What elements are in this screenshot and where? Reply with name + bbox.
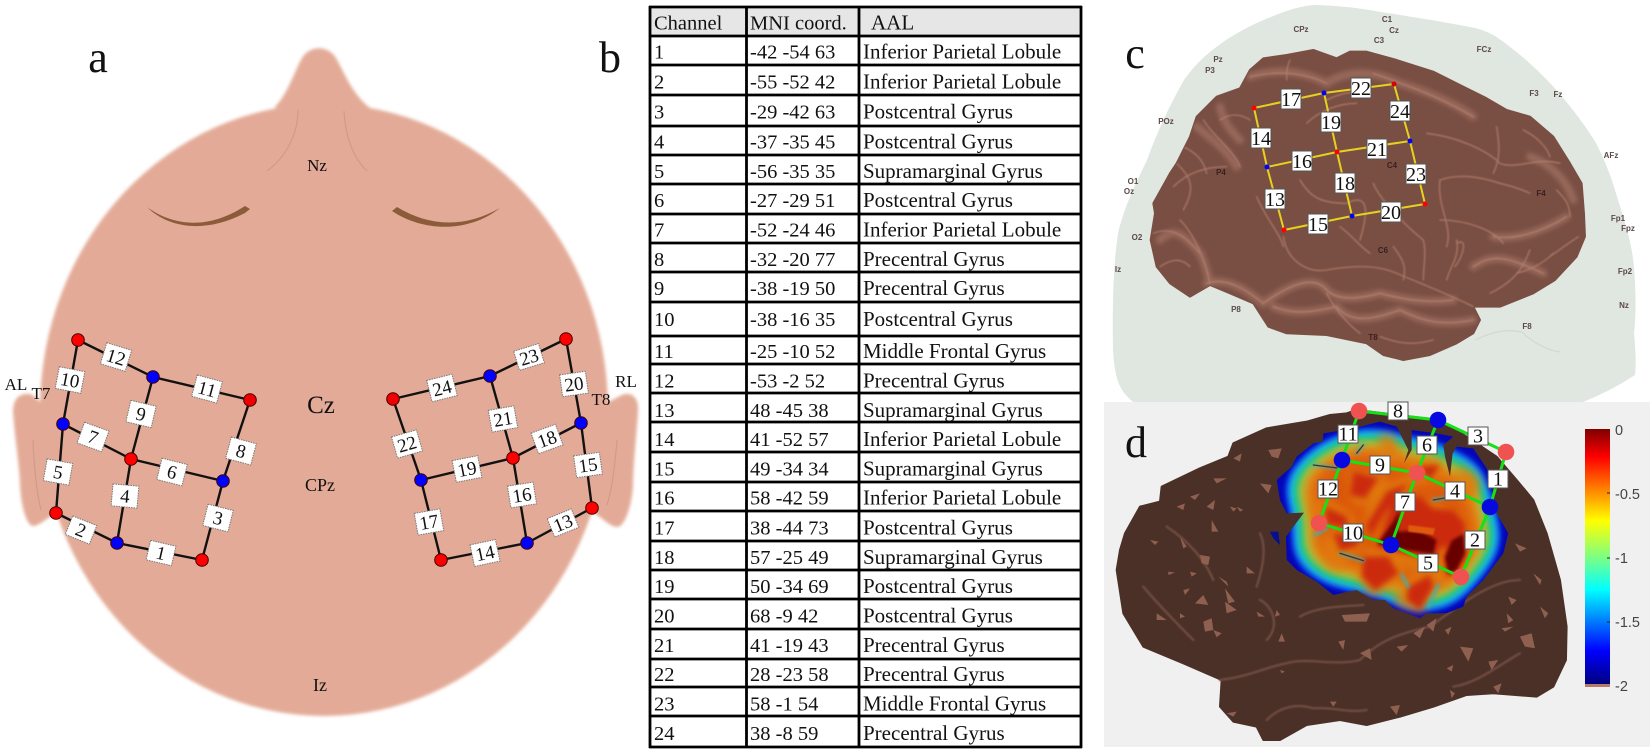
- table header row: MNI coord.: [750, 12, 847, 34]
- channel label 9: 9: [134, 404, 148, 426]
- channel label 14: [470, 540, 500, 567]
- channel 2 label: 2: [1470, 530, 1480, 552]
- channel 2 label: [1465, 530, 1485, 552]
- channel 21 label: 21: [1367, 139, 1387, 161]
- row 6: Postcentral Gyrus: [863, 188, 1013, 212]
- landmark labels: AL: [5, 375, 27, 394]
- row 17: Postcentral Gyrus: [863, 516, 1013, 540]
- row 8: [654, 247, 1005, 271]
- electrode labels: P8: [1231, 305, 1241, 314]
- colour bar: -1.5: [1615, 615, 1640, 631]
- electrode labels: Fpz: [1621, 224, 1635, 233]
- channel 8 label: 8: [1393, 400, 1403, 422]
- row 7: 7: [654, 220, 664, 242]
- row 7: Inferior Parietal Lobule: [863, 218, 1061, 242]
- channel 24 label: 24: [1390, 101, 1410, 123]
- channel label 8: [225, 437, 256, 465]
- row 20: [654, 604, 1013, 628]
- electrode labels: Iz: [1115, 265, 1121, 274]
- landmark labels: RL: [615, 372, 637, 391]
- green channel grid: [1319, 411, 1506, 577]
- row 15: Supramarginal Gyrus: [863, 456, 1043, 480]
- channel 5 label: [1418, 552, 1438, 574]
- row 2: 2: [654, 71, 664, 93]
- channel 13 label: 13: [1265, 189, 1285, 211]
- row 23: Middle Frontal Gyrus: [863, 692, 1046, 716]
- row 11: [654, 339, 1046, 363]
- channel label 18: 18: [535, 427, 560, 453]
- channel label 22: 22: [395, 432, 419, 458]
- electrode labels: C6: [1378, 246, 1389, 255]
- row 5: [654, 159, 1043, 183]
- landmark labels: CPz: [305, 475, 335, 495]
- channel label 3: 3: [211, 508, 225, 530]
- electrode labels: T8: [1368, 333, 1378, 342]
- channel 15 label: 15: [1308, 214, 1328, 236]
- channel label 2: [65, 516, 97, 546]
- electrode labels: Nz: [1619, 301, 1629, 310]
- row 22: 28 -23 58: [750, 664, 829, 686]
- row 7: -52 -24 46: [750, 220, 835, 242]
- channel 6 label: [1417, 434, 1437, 456]
- right channel grid lines: [393, 339, 592, 560]
- channel label 24: 24: [430, 376, 454, 401]
- row 16: 58 -42 59: [750, 488, 829, 510]
- landmark labels: Cz: [307, 392, 335, 419]
- row 3: Postcentral Gyrus: [863, 100, 1013, 124]
- channel label 20: 20: [563, 373, 585, 397]
- row 17: 17: [654, 518, 674, 540]
- row 1: -42 -54 63: [750, 42, 835, 64]
- electrode labels: FCz: [1477, 45, 1491, 54]
- channel label 6: [157, 458, 187, 486]
- row 11: Middle Frontal Gyrus: [863, 339, 1046, 363]
- row 6: 6: [654, 190, 664, 212]
- electrode labels: CPz: [1293, 25, 1309, 34]
- channel 10 label: 10: [1343, 522, 1363, 544]
- row 12: -53 -2 52: [750, 370, 825, 392]
- row 3: 3: [654, 102, 664, 124]
- channel 23 label: 23: [1406, 164, 1426, 186]
- channel label 24: [427, 374, 457, 402]
- row 21: [654, 633, 1005, 657]
- row 2: Inferior Parietal Lobule: [863, 69, 1061, 93]
- row 22: Precentral Gyrus: [863, 662, 1005, 686]
- row 20: 68 -9 42: [750, 606, 818, 628]
- row 4: 4: [654, 132, 664, 154]
- hot cores of activation: [1310, 435, 1480, 613]
- row 17: [654, 516, 1013, 540]
- pale patches: [1150, 448, 1548, 717]
- electrode labels: [1115, 15, 1635, 342]
- left eye: [147, 206, 250, 226]
- channel label 17: 17: [418, 511, 440, 535]
- electrode labels: Fz: [1554, 90, 1562, 99]
- electrode labels: C1: [1382, 15, 1393, 24]
- row 11: -25 -10 52: [750, 341, 835, 363]
- nose bridge lines: [33, 110, 617, 510]
- channel label 8: 8: [233, 441, 248, 463]
- row 13: 13: [654, 400, 674, 422]
- lobe edges between gyri: [1313, 445, 1462, 607]
- channel label 21: 21: [492, 408, 514, 432]
- row 9: [654, 276, 1005, 300]
- row 14: [654, 427, 1061, 451]
- panel letter d: d: [1125, 418, 1147, 467]
- channel label 13: 13: [551, 511, 576, 537]
- channel label 6: 6: [165, 462, 179, 484]
- panel letter b: b: [599, 33, 621, 82]
- optodes: [1311, 403, 1514, 585]
- channel 22 label: 22: [1351, 78, 1371, 100]
- row 7: [654, 218, 1061, 242]
- row 10: 10: [654, 309, 674, 331]
- yellow channel grid: [1254, 84, 1425, 230]
- row 12: [654, 368, 1005, 392]
- colour bar: -1: [1615, 551, 1628, 567]
- channel label 21: [488, 406, 518, 433]
- channel 9 label: 9: [1375, 454, 1385, 476]
- row 9: Precentral Gyrus: [863, 276, 1005, 300]
- electrode labels: POz: [1158, 117, 1174, 126]
- panel letter a: a: [88, 33, 108, 82]
- electrode labels: AFz: [1604, 151, 1618, 160]
- row 18: [654, 545, 1043, 569]
- colour bar: [1585, 423, 1640, 695]
- row 6: [654, 188, 1013, 212]
- row 22: [654, 662, 1005, 686]
- row 24: [654, 721, 1005, 745]
- table header background: [650, 7, 1081, 36]
- row 10: Postcentral Gyrus: [863, 307, 1013, 331]
- row 21: 41 -19 43: [750, 635, 829, 657]
- electrode labels: O2: [1132, 233, 1143, 242]
- panel d: activation map on brain: [1104, 400, 1650, 747]
- electrode labels: O1: [1128, 177, 1139, 186]
- row 2: [654, 69, 1061, 93]
- channel label 20: [560, 371, 588, 397]
- row 9: 9: [654, 278, 664, 300]
- jet-coloured activation region: [1277, 422, 1508, 618]
- row 24: 38 -8 59: [750, 723, 818, 745]
- row 18: 57 -25 49: [750, 547, 829, 569]
- channel label 17: [414, 509, 444, 536]
- table header row: Channel: [654, 12, 723, 34]
- electrode labels: F3: [1529, 89, 1539, 98]
- row 6: -27 -29 51: [750, 190, 835, 212]
- channel 9 label: [1370, 454, 1390, 476]
- row 4: -37 -35 45: [750, 132, 835, 154]
- row 5: 5: [654, 161, 664, 183]
- channel 20 label: 20: [1381, 202, 1401, 224]
- row 4: Postcentral Gyrus: [863, 130, 1013, 154]
- channel label 15: [574, 452, 602, 478]
- row 3: -29 -42 63: [750, 102, 835, 124]
- row 19: [654, 574, 1013, 598]
- row 23: 23: [654, 694, 674, 716]
- channel label 10: [55, 367, 85, 394]
- channel label 4: [111, 484, 139, 509]
- table header row: AAL: [871, 10, 914, 34]
- panel a: head montage: [5, 33, 638, 716]
- left optodes: [50, 334, 256, 566]
- right optodes: [387, 333, 598, 566]
- channel label 5: 5: [51, 462, 64, 484]
- channel label 11: [191, 375, 222, 403]
- channel label 10: 10: [58, 369, 81, 393]
- row 1: 1: [654, 42, 664, 64]
- channel label 18: [531, 424, 563, 454]
- row 11: 11: [654, 341, 674, 363]
- panel letter c: c: [1125, 29, 1145, 78]
- row 8: Precentral Gyrus: [863, 247, 1005, 271]
- channel label 2: 2: [72, 519, 89, 542]
- row 16: 16: [654, 488, 674, 510]
- channel 18 label: 18: [1335, 173, 1355, 195]
- row 8: -32 -20 77: [750, 249, 835, 271]
- row 14: Inferior Parietal Lobule: [863, 427, 1061, 451]
- row 8: 8: [654, 249, 664, 271]
- channel 8 label: [1388, 400, 1408, 422]
- electrode labels: Cz: [1389, 26, 1399, 35]
- panel background: [1104, 402, 1650, 747]
- channel label 16: 16: [511, 484, 533, 508]
- channel label 3: [203, 504, 233, 532]
- channel label 19: 19: [456, 458, 479, 482]
- row 13: [654, 398, 1043, 422]
- row 16: [654, 486, 1061, 510]
- channel label 4: 4: [119, 486, 131, 508]
- channel label 7: [77, 422, 109, 452]
- channel label 16: [507, 482, 537, 508]
- channel label 19: [452, 456, 482, 483]
- channel 3 label: 3: [1473, 426, 1483, 448]
- electrode labels: P4: [1216, 168, 1226, 177]
- electrode labels: P3: [1205, 66, 1215, 75]
- row 9: -38 -19 50: [750, 278, 835, 300]
- row 13: Supramarginal Gyrus: [863, 398, 1043, 422]
- row 20: 20: [654, 606, 674, 628]
- row 19: Postcentral Gyrus: [863, 574, 1013, 598]
- row 19: 50 -34 69: [750, 576, 829, 598]
- row 5: -56 -35 35: [750, 161, 835, 183]
- row 13: 48 -45 38: [750, 400, 829, 422]
- translucent scalp shape: [1113, 5, 1636, 402]
- row 24: 24: [654, 723, 674, 745]
- channel label 22: [391, 430, 423, 459]
- row 18: 18: [654, 547, 674, 569]
- row 15: [654, 456, 1043, 480]
- channel label 7: 7: [85, 426, 101, 449]
- row 19: 19: [654, 576, 674, 598]
- landmark labels: T8: [592, 390, 610, 409]
- row 12: 12: [654, 370, 674, 392]
- row 2: -55 -52 42: [750, 71, 835, 93]
- channel label 1: [146, 540, 176, 567]
- electrode labels: C4: [1387, 161, 1398, 170]
- row 24: Precentral Gyrus: [863, 721, 1005, 745]
- electrode labels: F4: [1536, 189, 1546, 198]
- electrode labels: C3: [1374, 36, 1385, 45]
- colour bar: -0.5: [1615, 487, 1640, 503]
- row 23: [654, 692, 1046, 716]
- table grid: [649, 6, 1082, 748]
- channel label 5: [43, 459, 73, 486]
- table header row: [654, 10, 914, 34]
- channel label 12: [100, 343, 132, 372]
- grid optodes: [1252, 82, 1428, 232]
- landmark labels: T7: [32, 384, 51, 403]
- row 18: Supramarginal Gyrus: [863, 545, 1043, 569]
- row 4: [654, 130, 1013, 154]
- left channel grid lines: [56, 340, 250, 560]
- panel b: channel table: [649, 6, 1082, 748]
- broad gyrus shading: [1160, 72, 1573, 323]
- row 20: Postcentral Gyrus: [863, 604, 1013, 628]
- channel 1 label: [1488, 468, 1508, 490]
- channel 6 label: 6: [1422, 434, 1432, 456]
- row 22: 22: [654, 664, 674, 686]
- channel 1 label: 1: [1493, 468, 1503, 490]
- channel 7 label: 7: [1400, 492, 1410, 514]
- channel 5 label: 5: [1423, 552, 1433, 574]
- channel 17 label: 17: [1281, 89, 1301, 111]
- channel label 1: 1: [154, 543, 168, 565]
- row 14: 41 -52 57: [750, 429, 829, 451]
- sulcal fold highlights: [1153, 60, 1578, 343]
- panel c: brain in scalp: [1113, 5, 1636, 402]
- row 16: Inferior Parietal Lobule: [863, 486, 1061, 510]
- channel 11 label: 11: [1338, 424, 1358, 446]
- channel 19 label: 19: [1321, 112, 1341, 134]
- row 3: [654, 100, 1013, 124]
- electrode labels: Fp2: [1618, 267, 1633, 276]
- channel 4 label: 4: [1450, 480, 1460, 502]
- row 10: -38 -16 35: [750, 309, 835, 331]
- row 15: 15: [654, 458, 674, 480]
- channel 16 label: 16: [1292, 151, 1312, 173]
- channel label 11: 11: [195, 377, 218, 402]
- colour bar: 0: [1615, 423, 1623, 439]
- row 1: [654, 40, 1061, 64]
- colour bar: -2: [1615, 679, 1628, 695]
- row 15: 49 -34 34: [750, 458, 829, 480]
- row 21: Precentral Gyrus: [863, 633, 1005, 657]
- electrode labels: Oz: [1124, 187, 1134, 196]
- channel 3 label: [1468, 426, 1488, 448]
- row 5: Supramarginal Gyrus: [863, 159, 1043, 183]
- channel label 23: 23: [517, 345, 541, 371]
- row 10: [654, 307, 1013, 331]
- row 23: 58 -1 54: [750, 694, 818, 716]
- head silhouette with nose and ears: [13, 48, 638, 716]
- landmark labels: Nz: [307, 156, 327, 175]
- channel label 9: [126, 400, 156, 428]
- channel label 14: 14: [474, 542, 497, 566]
- row 17: 38 -44 73: [750, 518, 829, 540]
- channel 4 label: [1445, 480, 1465, 502]
- channel 12 label: 12: [1318, 478, 1338, 500]
- channel label 12: 12: [104, 345, 128, 371]
- row 14: 14: [654, 429, 674, 451]
- row 12: Precentral Gyrus: [863, 368, 1005, 392]
- brain surface: [1151, 50, 1585, 360]
- landmark labels: Iz: [313, 675, 327, 695]
- faint surface folds: [1143, 527, 1520, 720]
- electrode labels: F8: [1522, 322, 1532, 331]
- channel 14 label: 14: [1251, 128, 1271, 150]
- row 1: Inferior Parietal Lobule: [863, 40, 1061, 64]
- electrode labels: Pz: [1213, 55, 1223, 64]
- right eye: [392, 207, 500, 227]
- channel label 15: 15: [577, 454, 599, 478]
- channel 7 label: [1395, 492, 1415, 514]
- brain surface and heat map: [1117, 410, 1567, 740]
- row 21: 21: [654, 635, 674, 657]
- landmark labels: [5, 156, 637, 695]
- electrode labels: Fp1: [1611, 214, 1626, 223]
